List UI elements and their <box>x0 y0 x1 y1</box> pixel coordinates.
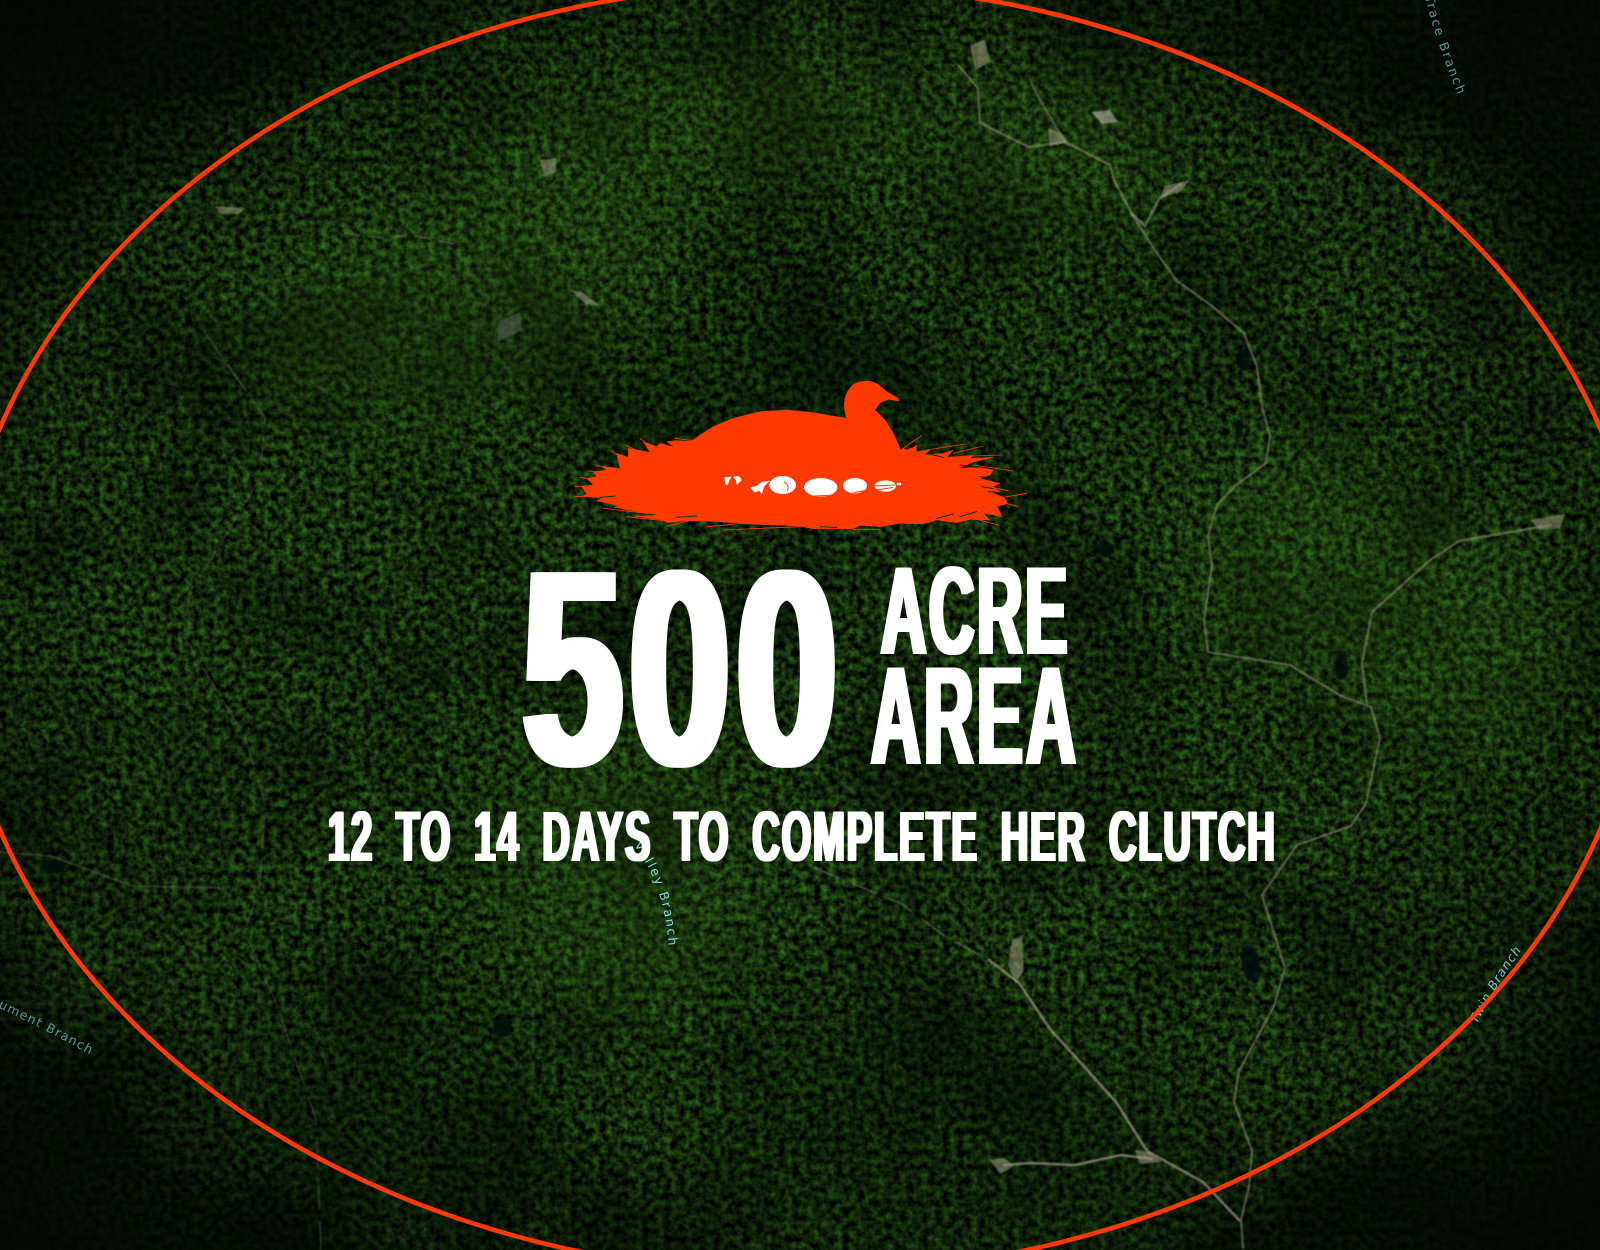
bird and nest silhouette <box>582 381 1007 529</box>
clearings <box>215 40 1565 1174</box>
ponds <box>42 349 1348 1037</box>
label: AREA: AREA <box>871 637 1079 794</box>
nest straw strands <box>575 436 1027 530</box>
stream label: Valley Branch: Valley Branch <box>636 842 678 945</box>
stream label: Twin Branch: Twin Branch <box>1470 948 1520 1022</box>
icon: grouse sitting on nest with eggs <box>575 381 1027 530</box>
lighter canopy areas <box>240 40 1570 1030</box>
label: ACRE: ACRE <box>881 542 1070 681</box>
subheading: clutch timing: 12 TO 14 DAYS TO COMPLETE HER CLUTCH <box>328 798 1277 877</box>
darker valley shading <box>220 330 1210 1250</box>
egg cracks <box>784 482 895 496</box>
big number: 500: 500 <box>522 513 843 825</box>
nest straw slits <box>600 453 1000 527</box>
eggs <box>724 476 901 497</box>
